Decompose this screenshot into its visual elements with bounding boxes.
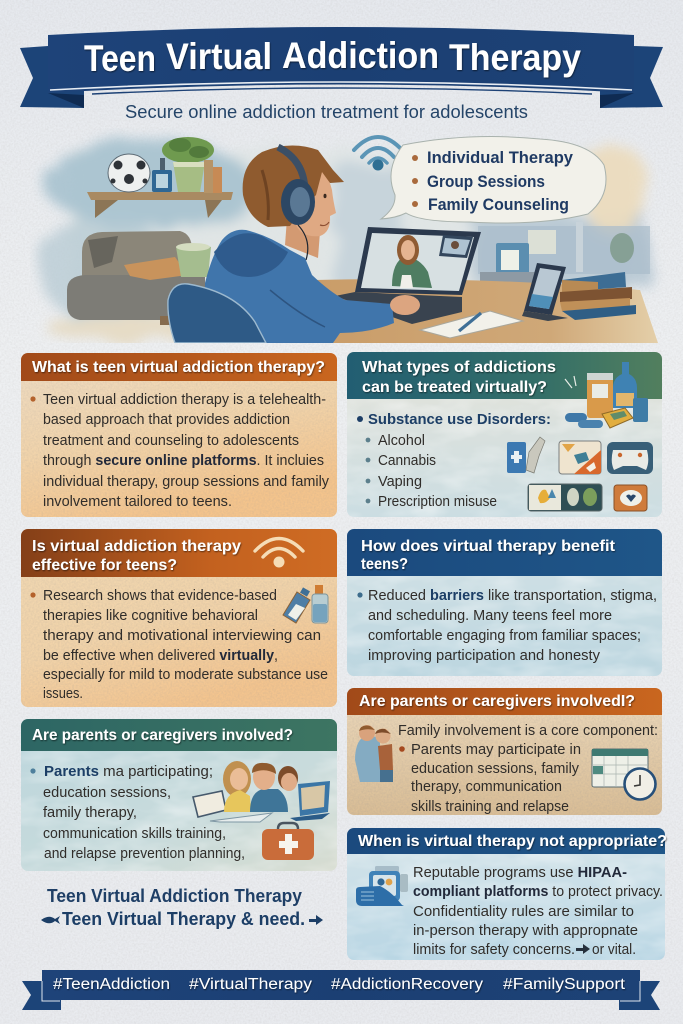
body text: or vital. — [592, 941, 636, 958]
sofa — [67, 231, 205, 325]
hashtags: #FamilySupport — [503, 976, 626, 993]
closing tagline — [41, 886, 323, 929]
hand — [390, 295, 420, 315]
hoodie — [205, 230, 394, 343]
body text: through secure online platforms. It incluies — [43, 452, 324, 469]
body text: therapies like cognitive behavioral — [43, 607, 258, 624]
body text: therapy and motivational interviewing can — [43, 627, 321, 644]
body text: Family involvement is a core component: — [398, 722, 658, 739]
icon: wifi — [354, 137, 402, 170]
body text — [357, 587, 657, 664]
hair — [243, 145, 344, 227]
hero illustration — [40, 137, 658, 343]
body text: compliant platforms to protect privacy. — [413, 883, 663, 900]
body text: in-person therapy with appropnate — [413, 922, 638, 939]
icon: arrows — [565, 376, 576, 388]
cushion — [124, 257, 181, 280]
phone — [522, 263, 568, 321]
shelf — [87, 192, 233, 218]
heading: Is virtual addiction therapy — [32, 538, 241, 555]
body text: individual therapy, group sessions and family — [43, 473, 329, 490]
headphones — [278, 147, 315, 260]
icon: first aid case — [262, 823, 314, 860]
title text: Virtual — [166, 36, 272, 77]
body text: communication skills training, — [43, 825, 226, 842]
hashtags: #VirtualTherapy — [189, 976, 312, 993]
plant — [162, 137, 214, 192]
body text: improving participation and honesty — [368, 647, 600, 664]
heading — [32, 538, 241, 574]
icon: calendar and clock — [592, 749, 656, 800]
heading — [361, 538, 616, 573]
icon: heart card — [614, 485, 647, 511]
title text: Therapy — [449, 37, 581, 78]
body text: limits for safety concerns. — [413, 941, 575, 958]
body list: Vaping — [378, 473, 422, 490]
body text: Research shows that evidence-based — [43, 587, 277, 604]
hashtag ribbon — [22, 970, 660, 1010]
icon: secure video platform — [356, 866, 408, 906]
body text: Parents ma participating; — [44, 763, 213, 780]
panel: is virtual addiction therapy effective — [21, 529, 337, 707]
body text: issues. — [43, 685, 83, 702]
body text: family therapy, — [43, 804, 137, 821]
body text — [30, 587, 328, 702]
desk — [300, 279, 658, 343]
body text: Reduced barriers like transportation, stigma, — [368, 587, 657, 604]
chair — [168, 284, 266, 343]
body list: Cannabis — [378, 452, 436, 469]
hashtags — [53, 976, 626, 993]
panel: what is teen virtual addiction therapy — [21, 353, 337, 517]
heading: Are parents or caregivers involved? — [32, 727, 293, 744]
body text: Reputable programs use HIPAA- — [413, 864, 627, 881]
body text: and scheduling. Many teens feel more — [368, 607, 612, 624]
body text: Confidentiality rules are similar to — [413, 903, 634, 920]
body text — [413, 864, 663, 958]
heading — [362, 359, 556, 396]
body text: therapy, communication — [411, 778, 562, 795]
watercolor backdrop — [40, 141, 650, 342]
icon: substance bottles — [565, 362, 648, 428]
body text: education sessions, — [43, 784, 171, 801]
panel: how does virtual therapy benefit teens — [347, 529, 662, 676]
title banner — [20, 27, 663, 108]
icon: parent and child — [355, 725, 393, 782]
body text — [30, 391, 329, 510]
body text: skills training and relapse — [411, 798, 569, 815]
heading: What types of addictions — [362, 359, 556, 376]
speech bubble: Individual Therapy — [427, 148, 574, 167]
panel: what types of addictions — [347, 352, 662, 517]
body text — [398, 722, 658, 815]
heading: Are parents or caregivers involvedI? — [359, 693, 635, 710]
window and room — [478, 224, 650, 283]
icon: soccer ball — [108, 154, 150, 192]
title text — [84, 35, 581, 79]
body text: comfortable engaging from familiar spaces; — [368, 627, 641, 644]
closing tagline: Teen Virtual Therapy & need. — [62, 909, 305, 929]
neck and face — [285, 168, 336, 258]
body text: treatment and counseling to adolescents — [43, 432, 299, 449]
hashtags: #TeenAddiction — [53, 976, 170, 993]
body text: involvement tailored to teens. — [43, 493, 232, 510]
icon: fish — [41, 916, 60, 924]
notebook and pen — [420, 311, 523, 338]
body text: education sessions, family — [411, 760, 579, 777]
speech bubble: Group Sessions — [427, 172, 545, 191]
icon: vape comparison card — [528, 484, 602, 511]
illustration: family with devices — [193, 761, 330, 822]
icon: can and spray — [507, 437, 545, 473]
heading: can be treated virtually? — [362, 379, 547, 396]
title text: Teen — [84, 38, 156, 79]
icon: map card — [559, 441, 601, 474]
closing tagline: Teen Virtual Addiction Therapy — [47, 886, 302, 906]
therapist on screen — [392, 235, 432, 288]
icon: arrow — [309, 915, 323, 925]
inset video — [439, 235, 473, 258]
body text: be effective when delivered virtually, — [43, 647, 278, 664]
heading: What is teen virtual addiction therapy? — [32, 359, 325, 376]
speech bubble — [381, 137, 606, 223]
body text: Teen virtual addiction therapy is a telehealth- — [43, 391, 326, 408]
speech bubble: Family Counseling — [428, 195, 569, 214]
icon: bottles — [283, 585, 328, 623]
heading: effective for teens? — [32, 557, 177, 574]
icon: wifi — [255, 538, 303, 568]
body list: Substance use Disorders: — [368, 411, 551, 428]
body text — [30, 763, 245, 862]
heading: How does virtual therapy benefit — [361, 538, 616, 555]
body text: especially for mild to moderate substance use — [43, 666, 328, 683]
photo frame — [152, 158, 172, 192]
body text: based approach that provides addiction — [43, 411, 290, 428]
laptop — [335, 227, 481, 324]
body list: Alcohol — [378, 432, 425, 449]
boy — [205, 145, 394, 343]
panel: when is virtual therapy not appropriate — [347, 828, 667, 960]
title text: Addiction — [282, 35, 439, 76]
body text: and relapse prevention planning, — [44, 845, 245, 862]
panel: are parents or caregivers involved (left) — [21, 719, 337, 871]
body list: Prescription misuse — [378, 493, 497, 510]
heading: teens? — [361, 556, 408, 573]
mug — [176, 243, 211, 277]
hashtags: #AddictionRecovery — [331, 976, 483, 993]
panel: are parents or caregivers involved (right) — [347, 688, 662, 815]
body list — [357, 411, 551, 510]
shelf books — [204, 160, 222, 193]
heading: When is virtual therapy not appropriate? — [358, 833, 667, 850]
body text: Parents may participate in — [411, 741, 581, 758]
subtitle: Secure online addiction treatment for adolescents — [125, 102, 528, 122]
icon: game controller — [607, 442, 653, 474]
book stack — [560, 272, 636, 320]
